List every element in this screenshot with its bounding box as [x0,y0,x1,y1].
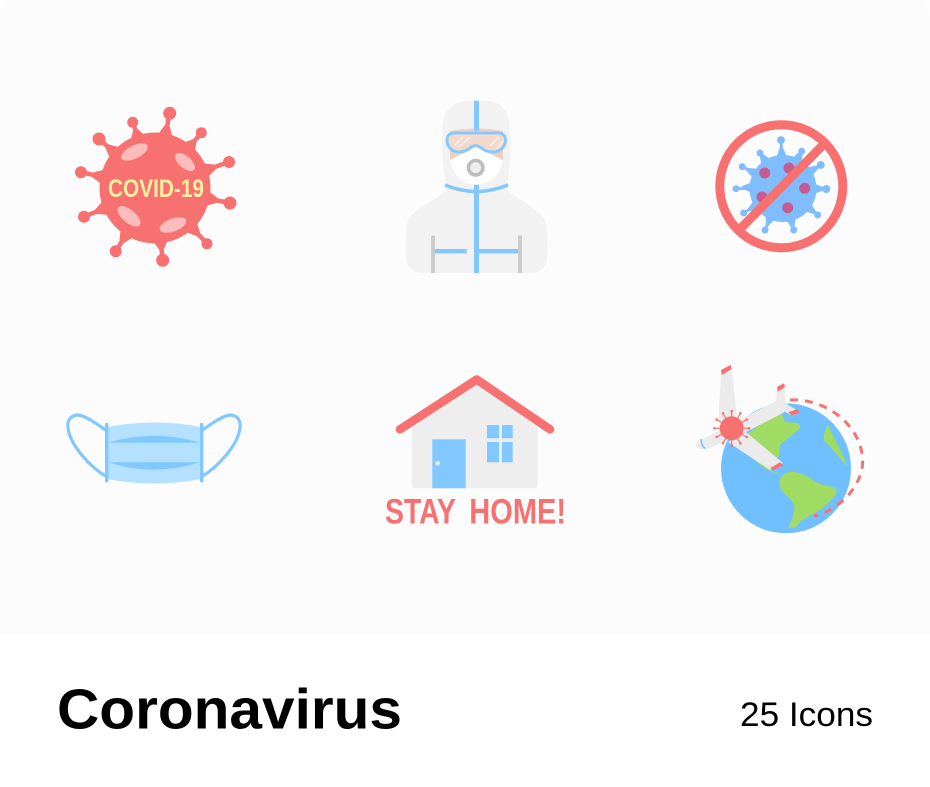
label: STAY HOME! [385,491,566,531]
icon: protective suit worker [406,101,547,273]
icon count: 25 Icons [740,696,873,734]
icon: COVID-19 virus [75,107,236,267]
icon: stay home house [385,380,566,531]
label: STAY HOME!: STAY [385,491,456,531]
icon: globe with plane spreading virus [696,365,863,533]
title: Coronavirus [57,677,402,741]
label: COVID-19: COVID-19 [108,175,204,203]
label: STAY HOME!: HOME! [469,491,566,531]
icon: no virus sign [720,125,843,248]
icon: surgical mask [68,415,240,484]
